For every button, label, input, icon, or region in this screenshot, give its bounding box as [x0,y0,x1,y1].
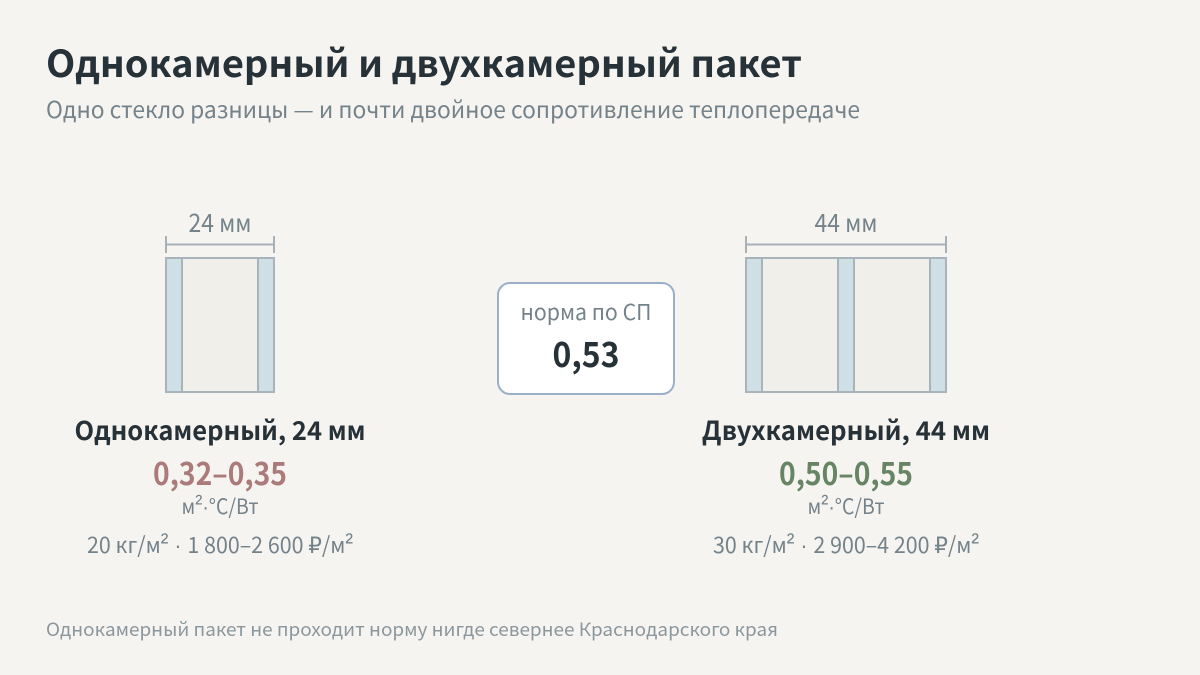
dimension: 44 mm: 44 мм [814,204,878,240]
unit: · [202,496,209,519]
heading: single-chamber: Однокамерный, 24 мм [74,411,366,448]
weight and price: 1 800–2 600 ₽/м [187,528,354,560]
weight and price: · [168,533,187,558]
weight and price: 30 кг/м [713,528,791,560]
panel: double-chamber unit [702,204,990,560]
value: single-chamber resistance: 0,32–0,35 [153,449,287,494]
unit: °C/Вт [209,491,263,521]
panel: single-chamber unit [74,204,366,560]
heading: double-chamber: Двухкамерный, 44 мм [702,411,990,448]
weight and price: ² [971,529,979,556]
weight and price: 2 900–4 200 ₽/м [813,528,980,560]
unit: · [828,496,835,519]
dimension: 44 mm [746,204,946,253]
unit: м [808,491,822,521]
title: Однокамерный и двухкамерный пакет [46,34,802,88]
unit: ² [821,490,829,516]
callout label: норма по СП [520,295,652,327]
unit: м [182,491,196,521]
footnote: Однокамерный пакет не проходит норму нигде севернее Краснодарского края [46,616,778,642]
diagram: single-chamber cross-section [166,258,274,392]
weight and price: ² [161,529,168,556]
weight and price: · [794,533,813,558]
unit: ² [195,490,203,516]
diagram: double-chamber cross-section [746,258,946,392]
dimension: 24 mm: 24 мм [188,204,252,240]
callout: code norm [498,283,674,394]
weight and price: ² [787,529,794,556]
unit: °C/Вт [835,491,889,521]
callout value: 0,53 [552,327,620,378]
value: double-chamber resistance: 0,50–0,55 [779,449,913,494]
weight and price: ² [345,529,353,556]
dimension: 24 mm [166,204,274,253]
subtitle: Одно стекло разницы — и почти двойное сопротивление теплопередаче [46,91,860,125]
weight and price: 20 кг/м [87,528,165,560]
